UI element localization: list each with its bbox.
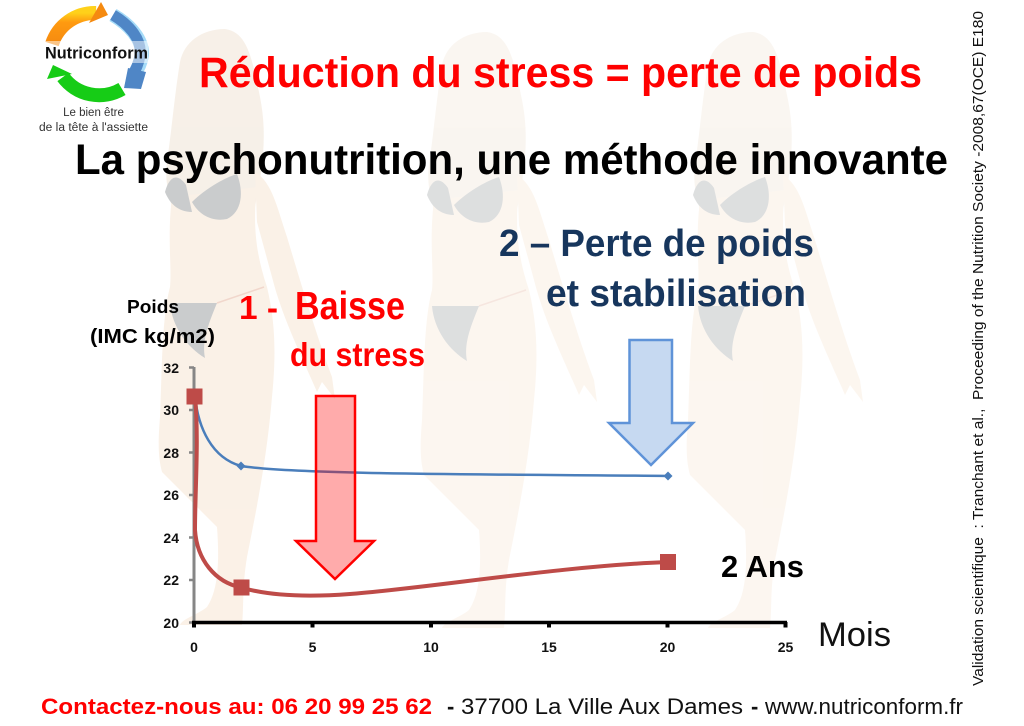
footer contact: Contactez-nous au: 06 20 99 25 62 — [41, 694, 432, 719]
logo: Nutriconform — [39, 2, 148, 134]
line chart — [163, 360, 793, 655]
y axis title: Poids — [127, 297, 179, 317]
background figure: woman centre — [421, 32, 597, 628]
y axis labels: 28 — [163, 445, 179, 461]
footer contact: - — [751, 694, 758, 719]
heading: step 1 — [239, 285, 425, 373]
blue series — [195, 396, 672, 480]
background figure: woman left — [159, 29, 335, 625]
vertical source citation: Validation scientifique : Tranchant et al., Proceeding of the Nutrition Society -2008,67(OCE) E180 — [970, 11, 987, 686]
logo tagline: Le bien être — [63, 107, 124, 119]
x axis labels: 5 — [309, 639, 317, 655]
background figure: woman right — [687, 32, 863, 628]
x axis labels: 20 — [660, 639, 675, 655]
x axis labels: 10 — [423, 639, 439, 655]
red series — [186, 388, 676, 596]
heading: step 1: 1 - — [239, 289, 278, 326]
heading: step 1: du stress — [290, 336, 425, 373]
x axis labels: 15 — [541, 639, 557, 655]
footer contact: www.nutriconform.fr — [764, 694, 963, 719]
title: Réduction du stress = perte de poids — [199, 49, 922, 97]
y axis labels — [163, 360, 179, 631]
heading: step 2: 2 – Perte de poids — [499, 223, 814, 265]
y axis — [189, 367, 194, 623]
subtitle: La psychonutrition, une méthode innovante — [75, 136, 948, 184]
x axis labels: 0 — [190, 639, 198, 655]
icon: blue arrow — [113, 15, 146, 89]
icon: orange arrow — [52, 2, 108, 44]
x axis — [192, 622, 787, 628]
arrow: blue down — [609, 340, 693, 465]
footer contact: - — [447, 694, 454, 719]
arrow: red down — [296, 396, 374, 579]
x axis labels — [190, 639, 793, 655]
x axis labels: 25 — [778, 639, 793, 655]
heading: step 1: Baisse — [295, 285, 405, 328]
logo: Nutriconform: de la tête à l'assiette — [39, 122, 148, 134]
y axis labels: 22 — [163, 572, 179, 588]
y axis labels: 20 — [163, 615, 179, 631]
icon: green arrow — [47, 65, 122, 95]
y axis labels: 32 — [163, 360, 179, 376]
y axis labels: 26 — [163, 487, 179, 503]
logo name: Nutriconform — [45, 44, 148, 62]
y axis title — [90, 297, 215, 348]
label: Mois: Mois — [818, 616, 891, 654]
heading: step 2: et stabilisation — [546, 273, 806, 315]
footer contact — [41, 694, 963, 719]
footer contact: 37700 La Ville Aux Dames — [461, 694, 743, 719]
label: 2 Ans: 2 Ans — [721, 549, 804, 584]
y axis labels: 30 — [163, 402, 179, 418]
y axis title: (IMC kg/m2) — [90, 326, 215, 348]
heading: step 2 — [499, 223, 814, 315]
y axis labels: 24 — [163, 530, 179, 546]
